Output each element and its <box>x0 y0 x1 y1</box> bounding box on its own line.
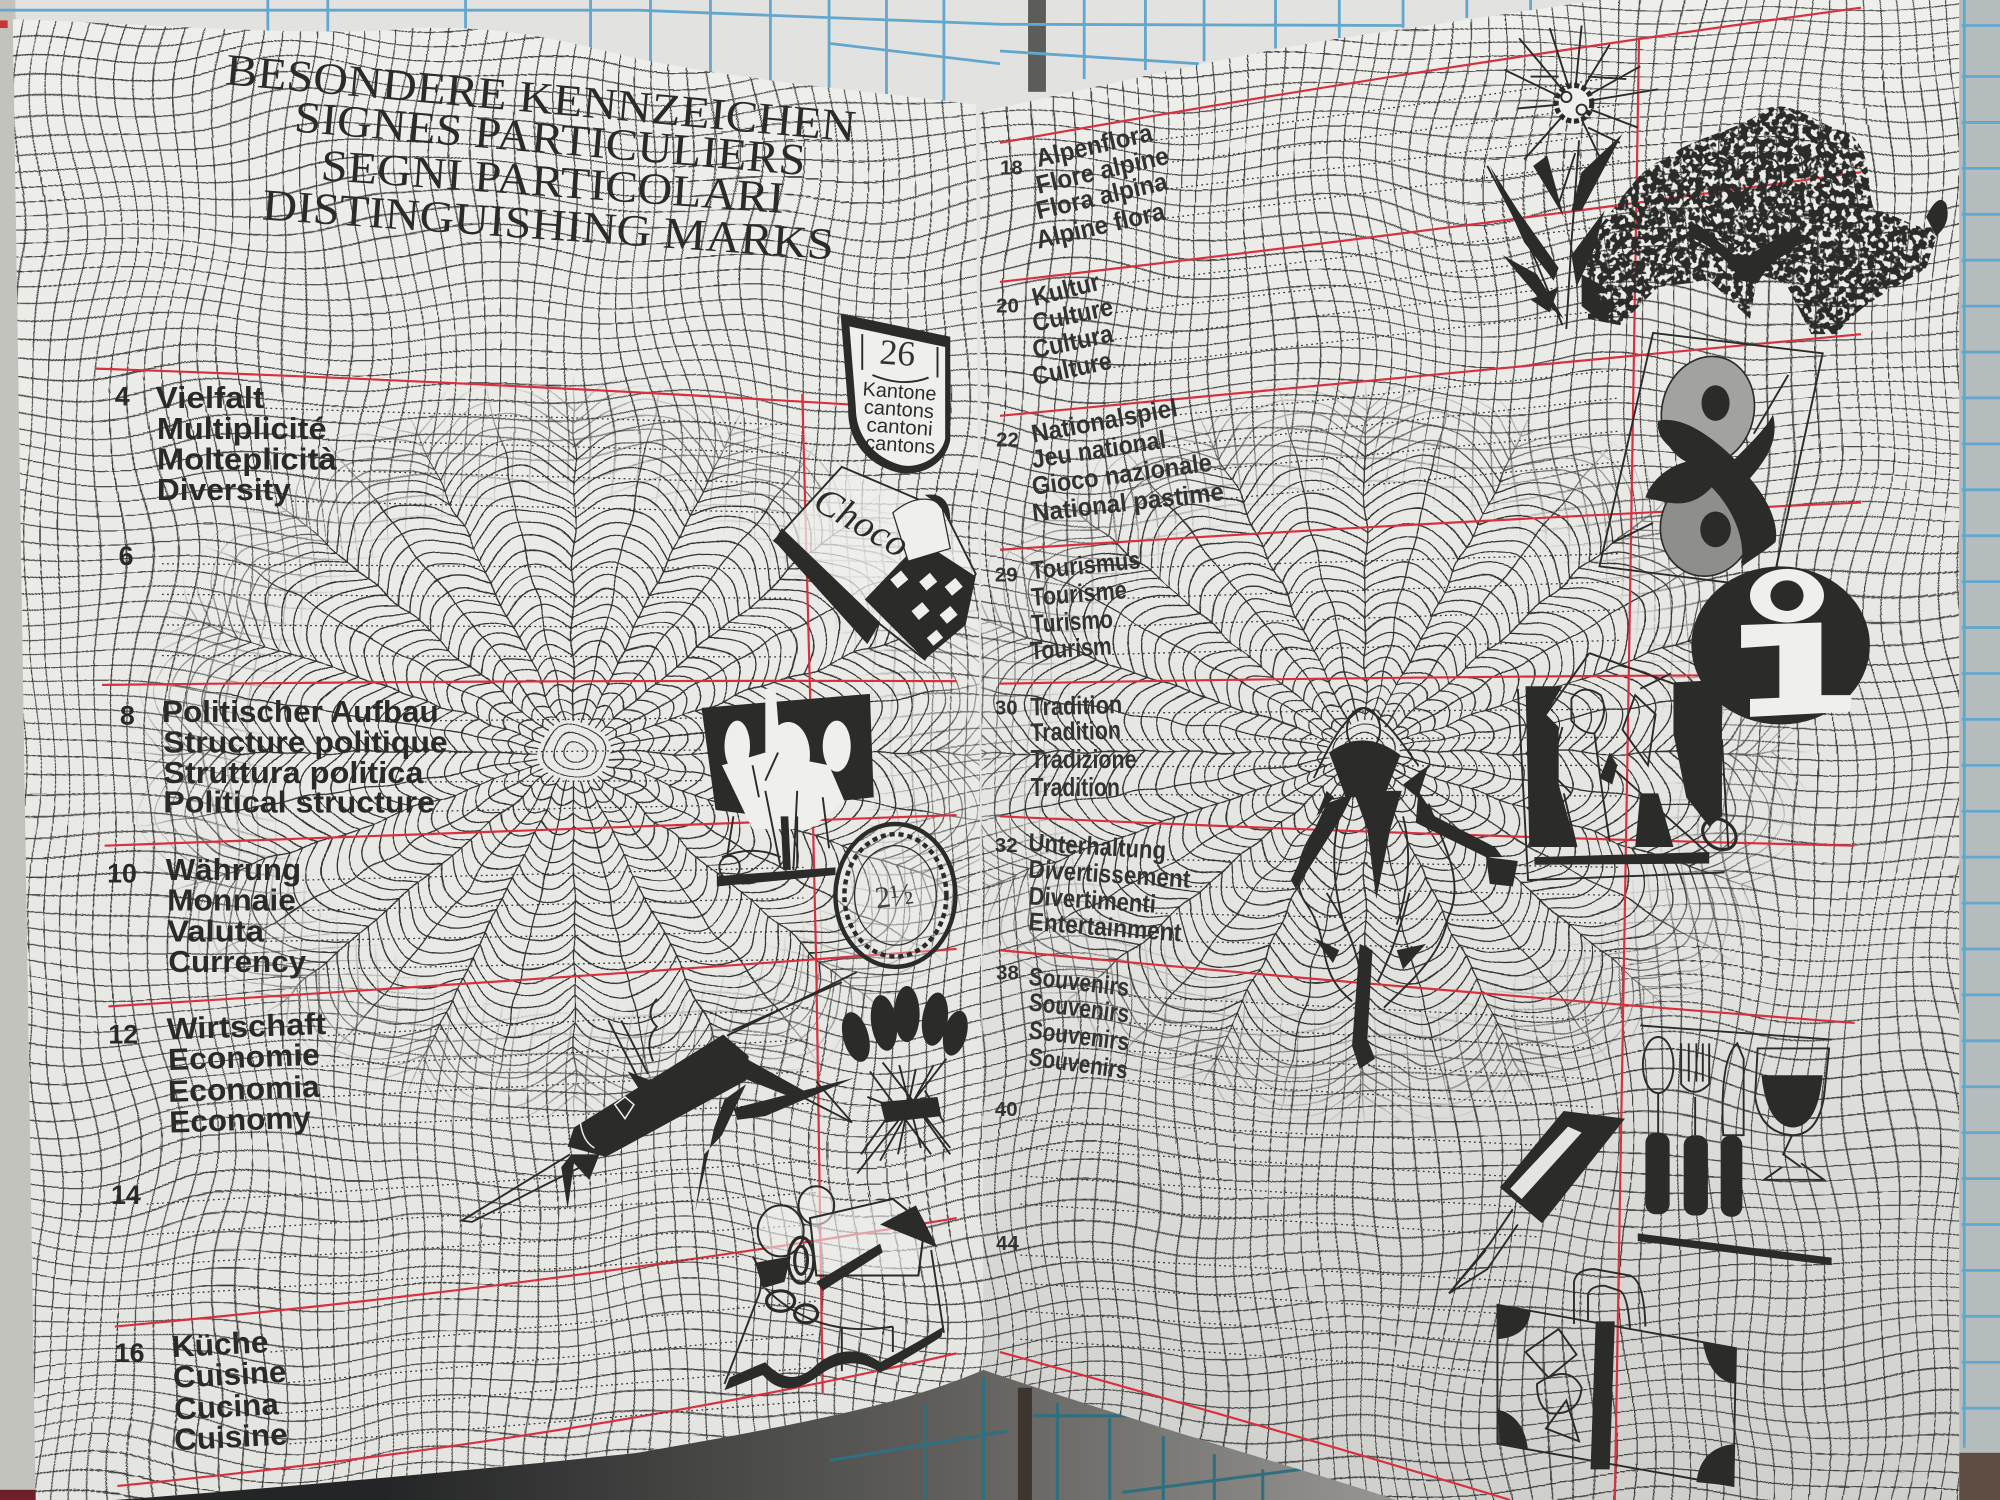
title: BESONDERE KENNZEICHEN <box>224 44 858 151</box>
icon: swiss army knife <box>462 972 857 1222</box>
icon: playing card Swiss national game <box>1599 333 1823 588</box>
icon: 26 cantons shield: cantons <box>864 432 936 459</box>
entry 38: Souvenirs: Souvenirs <box>1027 1016 1131 1057</box>
icon: paper cut floral <box>1582 106 1948 334</box>
entry 8: Politischer Aufbau: Political structure <box>163 785 435 819</box>
entry 20: Kultur: 20 <box>996 295 1019 317</box>
icon: 26 cantons shield: 26 <box>878 332 917 374</box>
icon: edelweiss flower <box>1487 26 1658 329</box>
entry 8: Politischer Aufbau: Struttura politica <box>163 756 425 790</box>
icon: 26 cantons shield: cantoni <box>866 414 933 441</box>
entry 29: Tourismus: Tourism <box>1029 632 1112 665</box>
entry 38: Souvenirs: Souvenirs <box>1027 1043 1130 1085</box>
icon: coin <box>835 824 955 967</box>
entry 10: Währung: Währung <box>166 853 301 887</box>
entry 29: Tourismus <box>995 546 1142 665</box>
entry 20: Kultur: Kultur <box>1029 268 1103 312</box>
entry 22: Nationalspiel: Nationalspiel <box>1029 394 1180 449</box>
entry 16: Küche <box>115 1325 288 1457</box>
entry 10: Währung: Monnaie <box>167 884 296 918</box>
entry 20: Kultur: Culture <box>1030 347 1114 391</box>
title: SIGNES PARTICULIERS <box>293 92 808 185</box>
entry 12: Wirtschaft: 12 <box>108 1019 138 1049</box>
entry 32: Unterhaltung: Entertainment <box>1028 908 1183 947</box>
entry 12: Wirtschaft: Economy <box>169 1101 311 1140</box>
title <box>224 44 858 269</box>
entry 12: Wirtschaft: Economie <box>167 1038 320 1077</box>
icon: chocolate bar <box>774 467 976 659</box>
entry 8: Politischer Aufbau: 8 <box>120 700 135 730</box>
icon: fountain pen <box>1449 1111 1625 1293</box>
entry 30: Tradition: 30 <box>995 697 1018 719</box>
entry 16: Küche: Cucina <box>173 1387 281 1427</box>
panel: right page <box>980 0 1960 1500</box>
entry 10: Währung <box>107 853 306 979</box>
icon: wheat sheaf <box>837 986 972 1173</box>
entry 30: Tradition: Tradition <box>1031 774 1120 802</box>
entry 18: Alpenflora <box>1000 119 1171 255</box>
entry 38: Souvenirs: Souvenirs <box>1027 963 1131 1002</box>
icon: cutlery and wine glass <box>1638 1026 1832 1265</box>
entry 29: Tourismus: Tourisme <box>1030 576 1128 612</box>
entry 30: Tradition: Tradition <box>1030 691 1123 722</box>
entry 4: Vielfalt: Multiplicité <box>157 412 327 446</box>
entry 32: Unterhaltung: 32 <box>995 835 1018 857</box>
entry 29: Tourismus: Tourismus <box>1030 546 1142 585</box>
page number 14: 14 <box>111 1180 141 1210</box>
entry 4: Vielfalt: 4 <box>115 382 130 412</box>
page number 40: 40 <box>995 1099 1018 1121</box>
entry 38: Souvenirs <box>996 963 1131 1085</box>
title: DISTINGUISHING MARKS <box>261 179 836 269</box>
entry 38: Souvenirs: 38 <box>996 963 1019 985</box>
page number 44: 44 <box>996 1233 1020 1255</box>
entry 4: Vielfalt: Vielfalt <box>156 381 264 415</box>
entry 30: Tradition <box>995 691 1136 802</box>
entry 10: Währung: 10 <box>107 859 137 889</box>
entry 30: Tradition: Tradizione <box>1031 746 1136 774</box>
entry 12: Wirtschaft <box>108 1007 327 1140</box>
entry 22: Nationalspiel <box>996 394 1225 528</box>
entry 22: Nationalspiel: 22 <box>996 429 1019 451</box>
icon: chocolate bar: Choco <box>807 479 916 566</box>
entry 38: Souvenirs: Souvenirs <box>1027 988 1131 1028</box>
entry 16: Küche: Küche <box>171 1325 269 1364</box>
entry 20: Kultur <box>996 268 1116 391</box>
entry 18: Alpenflora: Flora alpina <box>1033 168 1171 225</box>
entry 8: Politischer Aufbau: Structure politique <box>163 726 448 760</box>
entry 22: Nationalspiel: Jeu national <box>1030 426 1168 474</box>
entry 18: Alpenflora: 18 <box>1000 158 1023 180</box>
entry 16: Küche: Cuisine <box>172 1355 287 1395</box>
entry 8: Politischer Aufbau <box>120 695 448 820</box>
entry 8: Politischer Aufbau: Politischer Aufbau <box>162 695 439 729</box>
entry 4: Vielfalt <box>115 381 338 507</box>
entry 30: Tradition: Tradition <box>1030 717 1121 747</box>
icon: tourist information i <box>1691 566 1870 724</box>
icon: meat grinder on tablecloth <box>724 1186 944 1390</box>
icon: 26 cantons shield <box>841 314 950 474</box>
entry 10: Währung: Currency <box>168 945 306 979</box>
title: SEGNI PARTICOLARI <box>319 140 786 223</box>
panel: left page <box>0 0 1071 1500</box>
icon: dancer <box>1291 708 1518 1069</box>
icon: 26 cantons shield: Kantone <box>862 378 937 406</box>
entry 16: Küche: 16 <box>115 1338 145 1368</box>
entry 4: Vielfalt: Diversity <box>157 473 291 507</box>
entry 29: Tourismus: 29 <box>995 565 1018 587</box>
entry 20: Kultur: Culture <box>1030 293 1116 338</box>
entry 4: Vielfalt: Molteplicità <box>157 442 338 476</box>
entry 32: Unterhaltung <box>995 829 1192 947</box>
entry 16: Küche: Cuisine <box>173 1417 288 1457</box>
entry 20: Kultur: Cultura <box>1030 320 1116 364</box>
entry 18: Alpenflora: Flore alpine <box>1033 142 1171 200</box>
icon: traditional figures in black frame <box>1518 653 1742 880</box>
icon: politicians raising hands <box>702 689 874 886</box>
entry 29: Tourismus: Turismo <box>1031 606 1114 639</box>
entry 32: Unterhaltung: Unterhaltung <box>1028 829 1167 865</box>
entry 10: Währung: Valuta <box>167 914 265 948</box>
icon: 26 cantons shield: cantons <box>863 396 935 423</box>
entry 18: Alpenflora: Alpine flora <box>1033 198 1168 255</box>
icon: coin: 2½ <box>873 876 915 915</box>
entry 12: Wirtschaft: Wirtschaft <box>166 1007 327 1047</box>
entry 32: Unterhaltung: Divertissement <box>1028 856 1192 894</box>
entry 18: Alpenflora: Alpenflora <box>1033 119 1156 173</box>
entry 12: Wirtschaft: Economia <box>167 1070 321 1109</box>
entry 22: Nationalspiel: Gioco nazionale <box>1030 449 1213 501</box>
entry 22: Nationalspiel: National pastime <box>1031 478 1225 528</box>
page number 6: 6 <box>119 541 134 571</box>
entry 32: Unterhaltung: Divertimenti <box>1028 882 1157 919</box>
icon: suitcase <box>1497 1269 1736 1486</box>
